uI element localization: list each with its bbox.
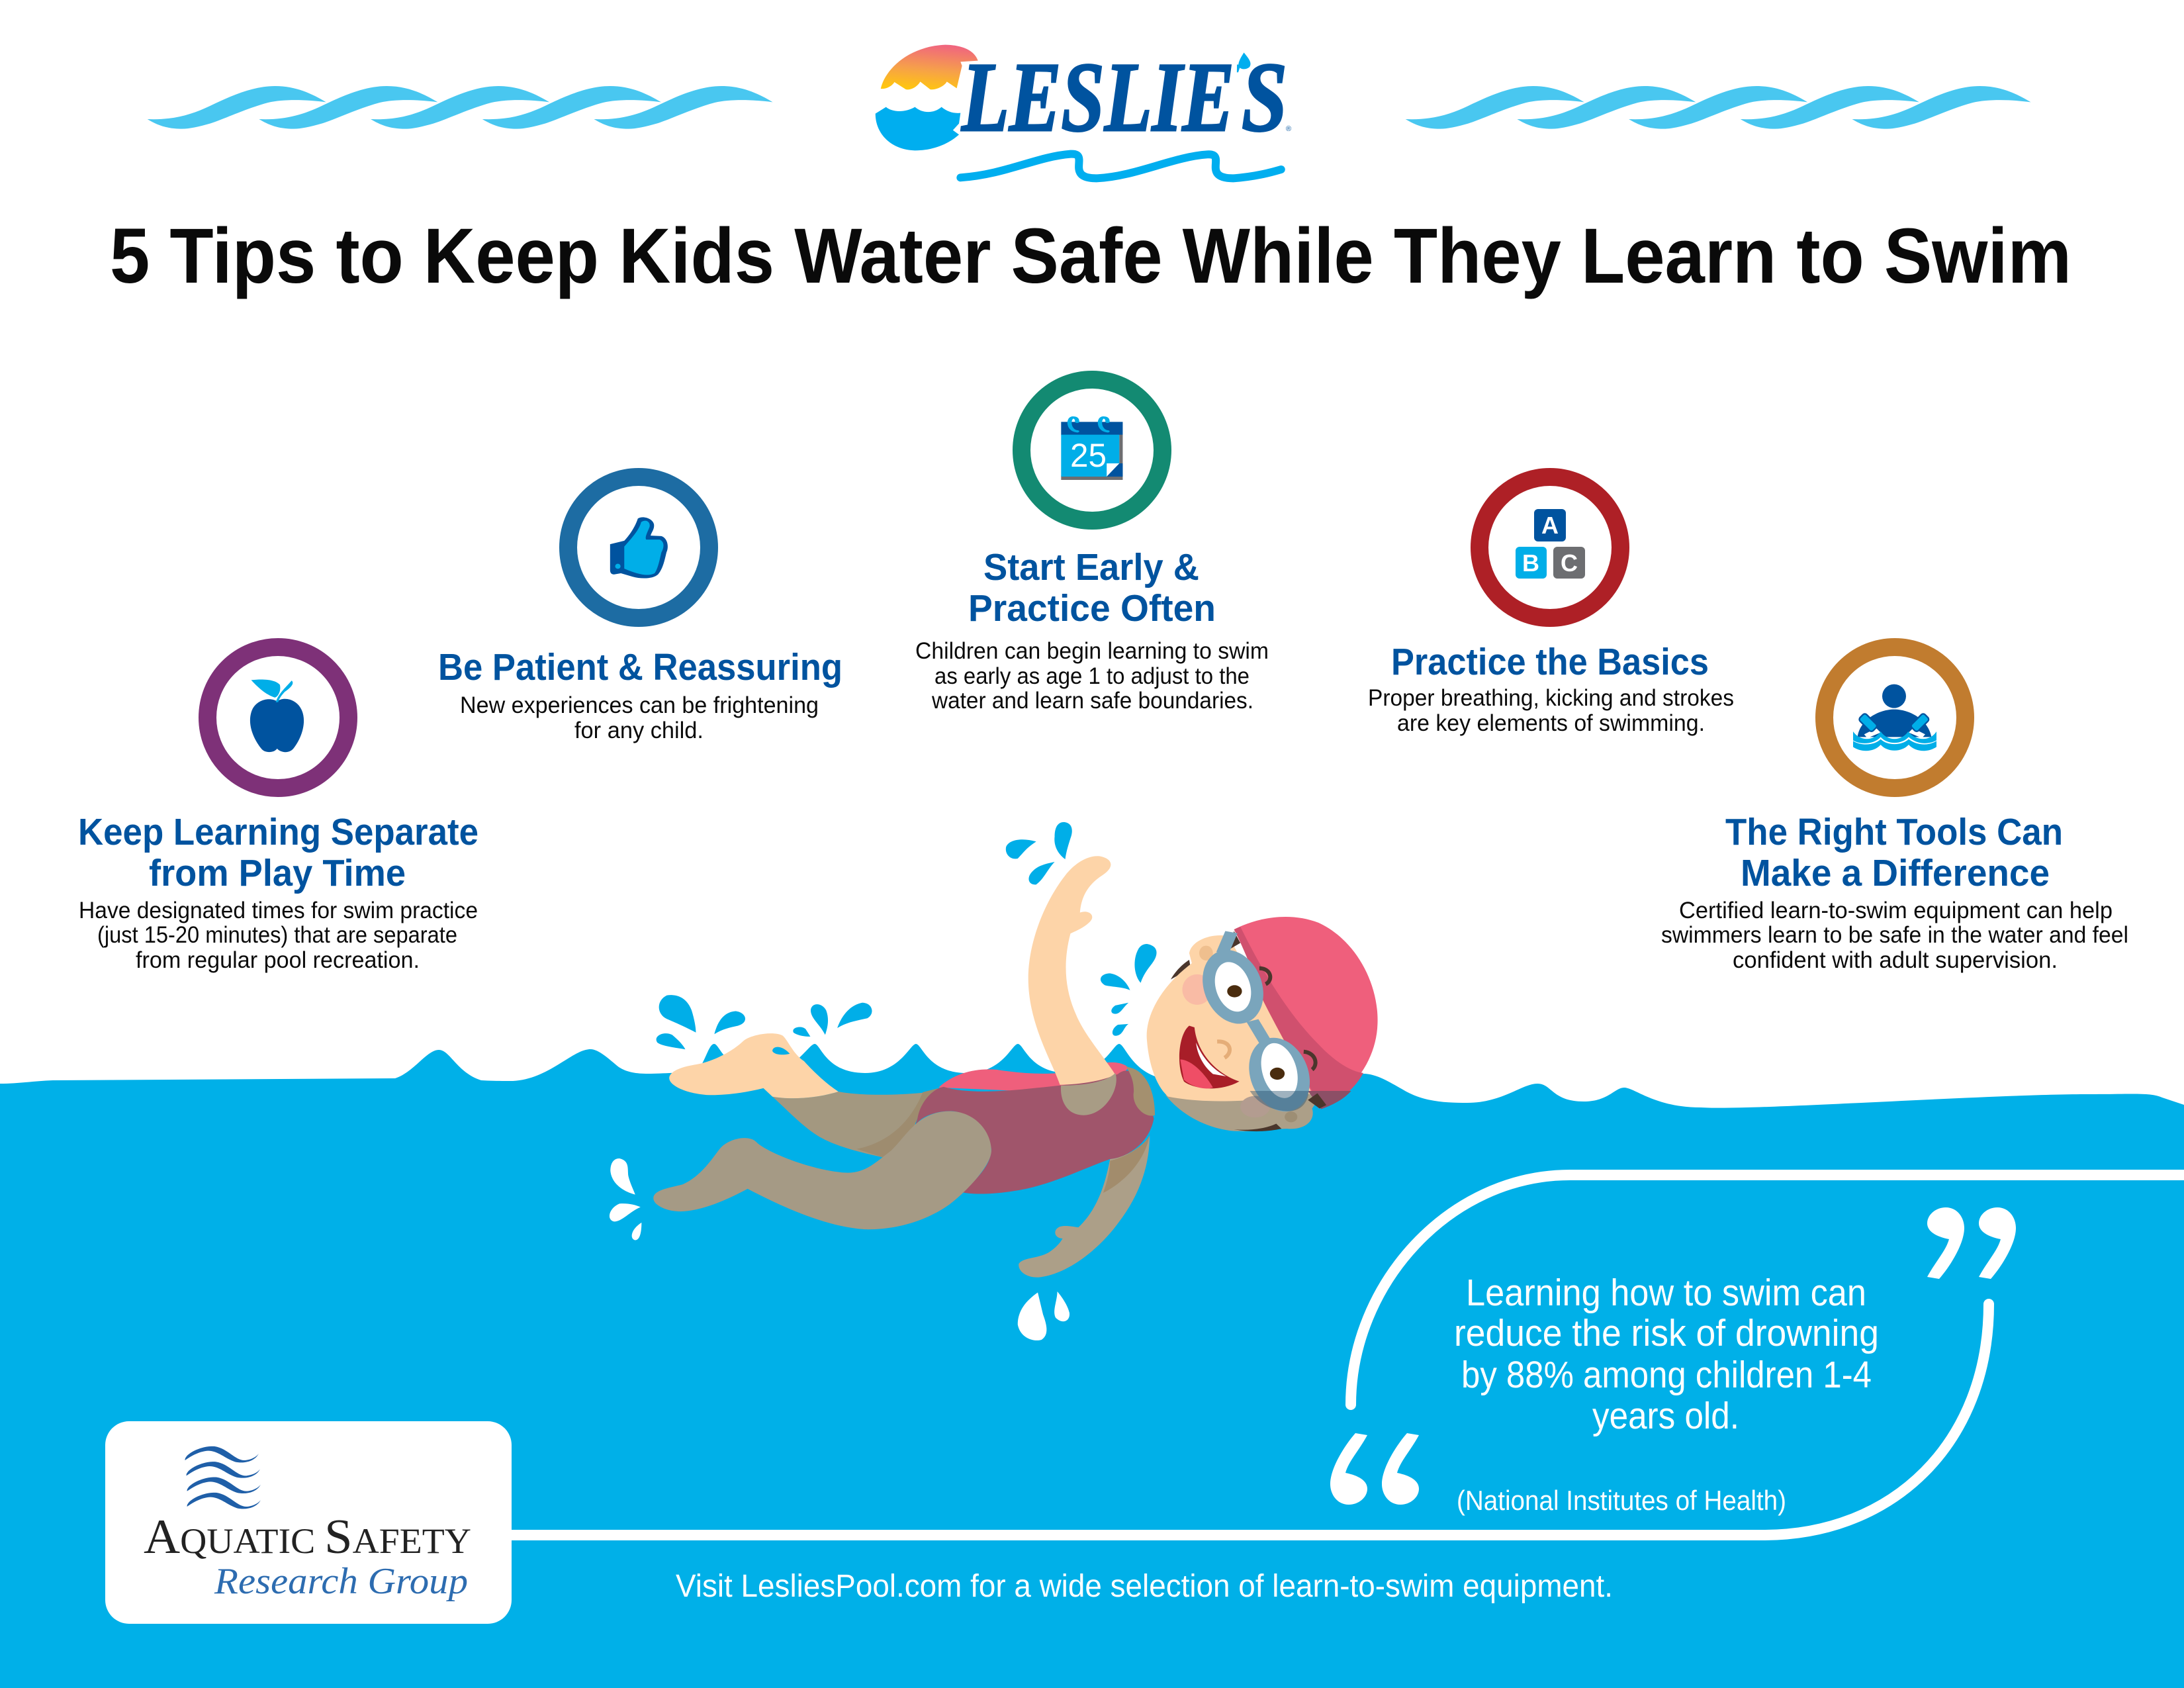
logo wordmark: S [1242, 42, 1287, 152]
body text: Have designated times for swim practice [79, 898, 478, 923]
body text [460, 692, 819, 743]
swimsuit [915, 1062, 1154, 1194]
quote frame bottom line [512, 1304, 1989, 1535]
water [0, 1044, 2184, 1688]
body text [915, 638, 1269, 714]
decorative wave right [1406, 86, 2031, 129]
icon: apple in purple ring [208, 647, 348, 788]
body text: New experiences can be frightening [460, 692, 819, 718]
registered mark: ® [1286, 125, 1291, 133]
body text: Certified learn-to-swim equipment can help [1679, 898, 2113, 923]
body text: for any child. [574, 718, 704, 743]
body text [1368, 685, 1734, 736]
Leslie's logo [876, 42, 1291, 178]
raised arm [1028, 856, 1155, 1115]
title: 5 Tips to Keep Kids Water Safe While They Learn to Swim [110, 212, 2071, 300]
quote text: years old. [1592, 1395, 1739, 1437]
lower arm [1019, 1135, 1150, 1278]
body text: swimmers learn to be safe in the water and feel [1661, 922, 2128, 948]
website call to action: Visit LesliesPool.com for a wide selection of learn-to-swim equipment. [676, 1569, 1613, 1604]
icon: thumbs up in blue ring [568, 477, 709, 618]
logo wordmark: ' [1232, 56, 1242, 93]
panel: be patient [438, 477, 842, 743]
icon: abc blocks in red ring: B [1522, 549, 1539, 577]
logo subtitle: Research Group [214, 1561, 468, 1602]
quote source: (National Institutes of Health) [1457, 1485, 1786, 1516]
closing quotation mark [1927, 1207, 2016, 1279]
back leg [669, 1033, 938, 1157]
heading: Make a Difference [1741, 852, 2050, 894]
panel: keep learning separate [78, 647, 478, 973]
nose [1217, 1041, 1230, 1058]
panel: start early [915, 380, 1269, 714]
body text: are key elements of swimming. [1397, 710, 1705, 736]
decorative wave left [148, 86, 773, 129]
heading: from Play Time [149, 852, 406, 894]
icon: abc blocks in red ring: A [1541, 512, 1559, 539]
panel: practice the basics [1368, 477, 1734, 736]
logo waves [185, 1446, 261, 1509]
panel: the right tools [1661, 647, 2128, 973]
body text: water and learn safe boundaries. [931, 688, 1253, 714]
icon: swimmer with floaties in orange ring [1824, 647, 1966, 788]
quote text: by 88% among children 1-4 [1461, 1354, 1872, 1396]
quote text: Learning how to swim can [1466, 1272, 1866, 1314]
heading: The Right Tools Can [1725, 811, 2063, 853]
quote frame top line [1351, 1175, 2184, 1405]
body text: as early as age 1 to adjust to the [934, 663, 1250, 689]
heading: Be Patient & Reassuring [438, 646, 842, 688]
quote text [1454, 1272, 1879, 1437]
heading [1725, 811, 2063, 894]
body text: confident with adult supervision. [1733, 947, 2058, 973]
goggles [1196, 932, 1317, 1114]
body text [79, 898, 478, 973]
mouth [1179, 1025, 1240, 1088]
front leg [653, 1111, 991, 1229]
logo wordmark: LESLIE [960, 42, 1234, 152]
heading: Practice the Basics [1391, 641, 1709, 683]
swimmer illustration [610, 822, 1378, 1340]
icon: abc blocks in red ring [1480, 477, 1620, 618]
heading: Keep Learning Separate [78, 811, 478, 853]
body text: Proper breathing, kicking and strokes [1368, 685, 1734, 711]
Aquatic Safety Research Group logo [105, 1421, 512, 1624]
heading: Practice Often [968, 587, 1216, 630]
head [1147, 917, 1378, 1131]
logo name: AQUATIC SAFETY [144, 1510, 471, 1564]
body text: (just 15-20 minutes) that are separate [97, 922, 457, 948]
logo emblem: sun and water [876, 45, 1281, 178]
icon: abc blocks in red ring: C [1561, 549, 1578, 577]
icon: calendar in green ring: 25 [1070, 437, 1107, 474]
body text: from regular pool recreation. [136, 947, 420, 973]
heading [968, 546, 1216, 630]
heading [78, 811, 478, 894]
splash drops above water [657, 822, 1157, 1049]
heading: Start Early & [983, 546, 1199, 588]
swim cap [1234, 917, 1378, 1108]
body text [1661, 898, 2128, 973]
icon: calendar in green ring [1022, 380, 1162, 520]
opening quotation mark [1330, 1433, 1419, 1505]
body text: Children can begin learning to swim [915, 638, 1269, 664]
white splash drops under water [610, 1158, 1069, 1340]
quote text: reduce the risk of drowning [1454, 1312, 1879, 1354]
